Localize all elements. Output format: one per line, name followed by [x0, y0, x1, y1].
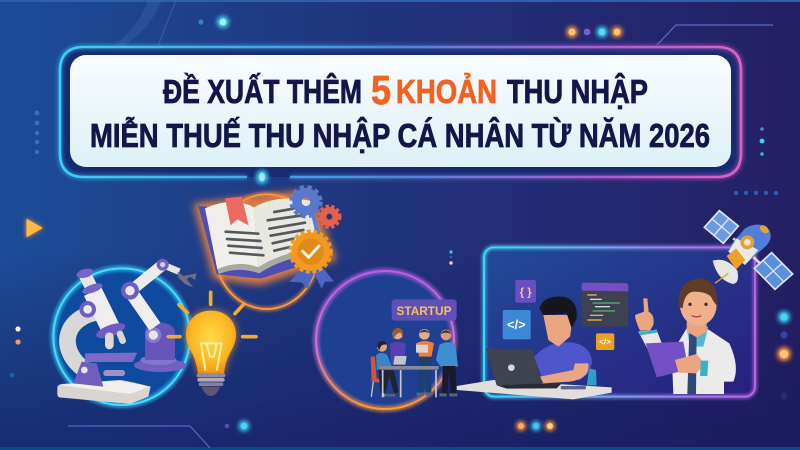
- orange tag tile: </>: [599, 337, 611, 346]
- illustration: startup and technology: [316, 211, 793, 409]
- frame dot: [256, 170, 268, 184]
- blue neon circle: [53, 268, 190, 405]
- code window: [582, 283, 628, 327]
- title line 1: 5: [371, 67, 391, 113]
- white panel: [70, 55, 731, 167]
- gears: [291, 187, 340, 227]
- icon: satellite: [704, 211, 793, 289]
- illustration: science and innovation: [53, 187, 340, 405]
- title line 1: THU NHẬP: [507, 73, 648, 110]
- technology screen panel: [484, 247, 755, 397]
- icon: robot arm: [121, 259, 197, 372]
- ribbons: [289, 266, 334, 289]
- purple neon circle: [316, 271, 454, 409]
- icon: light bulb: [168, 292, 256, 396]
- title line 1: KHOẢN: [396, 73, 497, 110]
- title line 1: ĐỀ XUẤT THÊM: [163, 73, 362, 110]
- title line 1: [163, 67, 648, 113]
- icon: play arrow: [26, 218, 43, 238]
- braces tile: { }: [520, 287, 532, 299]
- medal: [291, 232, 330, 271]
- developer at laptop: [457, 296, 612, 399]
- code tiles: [503, 280, 628, 350]
- neon frame: [60, 47, 741, 177]
- startup team: [371, 299, 458, 397]
- title banner: [60, 47, 741, 184]
- icon: open book with medal: [193, 187, 340, 289]
- icon: microscope: [57, 267, 151, 404]
- scientist with tablet: [635, 278, 736, 394]
- html tag tile: </>: [507, 318, 525, 332]
- orange neon circle: [215, 194, 318, 309]
- startup sign: STARTUP: [396, 304, 451, 318]
